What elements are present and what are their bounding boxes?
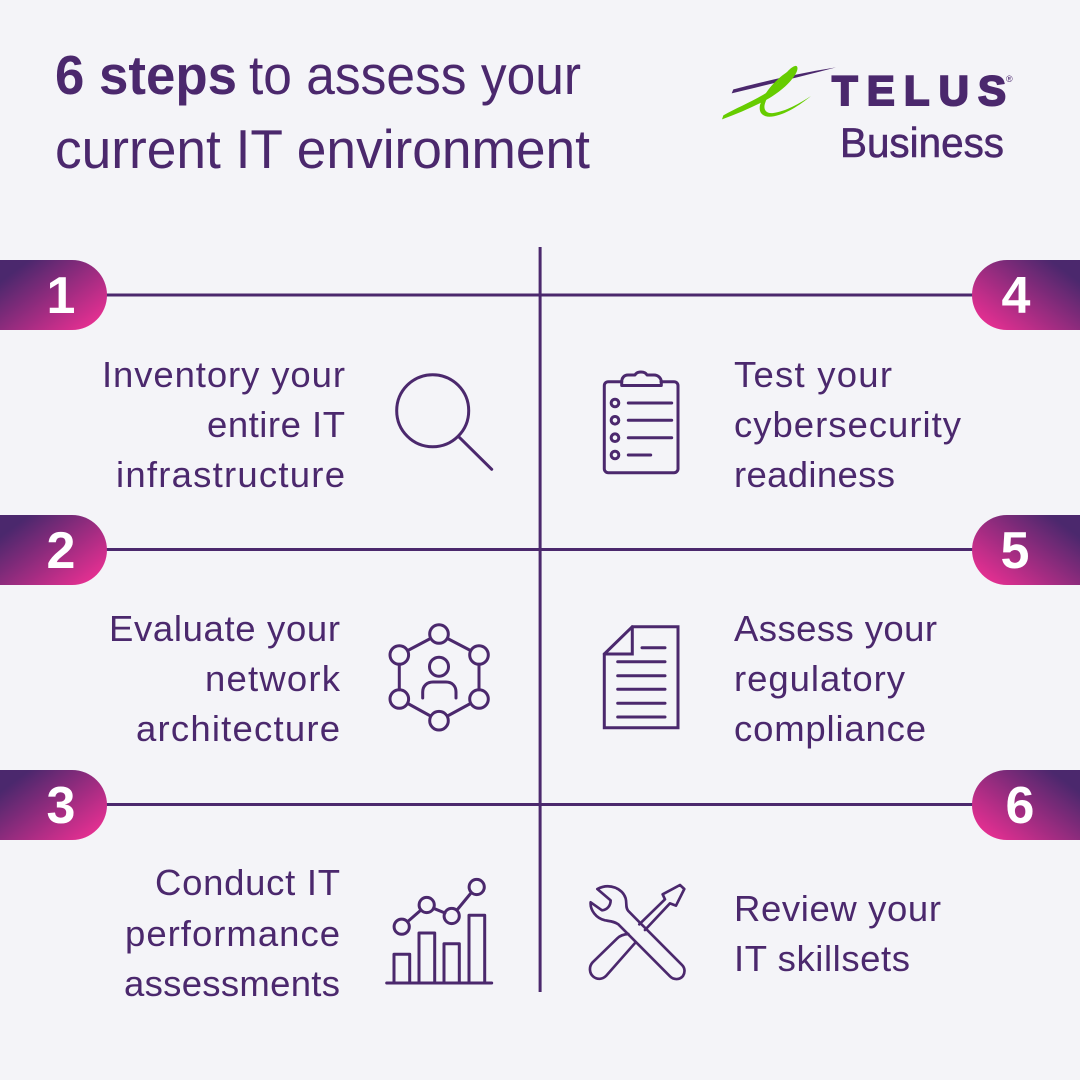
step 2 text: architecture [136,708,340,749]
title: 6 steps [55,44,237,106]
step 5 text [734,608,937,749]
step 2 badge [0,515,107,585]
step 4 badge: 4 [1002,267,1031,325]
step 1 badge: 1 [47,267,75,325]
step 3 badge [0,770,107,840]
step 5 text: Assess your [734,608,937,649]
title [55,44,590,180]
logo: TELUS Business: TELUS [832,67,1006,114]
step 4 text: Test your [734,354,892,395]
step 1 badge [0,260,107,330]
step 2 connector line [105,548,975,551]
step 5 text: regulatory [734,658,906,699]
logo: TELUS Business [722,66,1013,166]
icon: performance chart [387,879,492,983]
logo: TELUS Business: ® [1006,74,1013,84]
icon: magnifying glass [397,375,492,469]
icon: wrench and screwdriver [590,885,684,979]
step 6 text: Review your [734,888,941,929]
title: to assess your [249,44,581,106]
step 2 text: network [205,658,341,699]
step 4 text: readiness [734,454,895,495]
center vertical divider [539,247,542,992]
step 5 badge [972,515,1080,585]
step 1 connector line [105,294,975,296]
step 4 text: cybersecurity [734,404,962,445]
icon: network with person [390,625,488,730]
step 6 badge: 6 [1006,777,1034,835]
step 1 text: Inventory your [102,354,345,395]
icon: clipboard checklist [604,372,678,473]
step 5 text: compliance [734,708,926,749]
step 2 text [109,608,341,749]
step 6 badge [972,770,1080,840]
step 4 badge [972,260,1080,330]
step 1 text: entire IT [207,404,345,445]
step 3 text: assessments [124,963,340,1004]
step 1 text [102,354,345,495]
step 2 badge: 2 [47,522,75,580]
title: current IT environment [55,118,590,180]
step 2 text: Evaluate your [109,608,340,649]
icon: document [604,627,678,728]
step 3 text: performance [125,913,340,954]
step 4 text [734,354,962,495]
step 5 badge: 5 [1001,522,1029,580]
step 3 badge: 3 [47,777,75,835]
step 3 text: Conduct IT [155,862,340,903]
step 3 text [124,862,340,1004]
step 1 text: infrastructure [116,454,345,495]
step 3 connector line [105,803,975,806]
logo: TELUS Business: Business [840,119,1004,166]
step 6 text [734,888,941,979]
step 6 text: IT skillsets [734,938,910,979]
